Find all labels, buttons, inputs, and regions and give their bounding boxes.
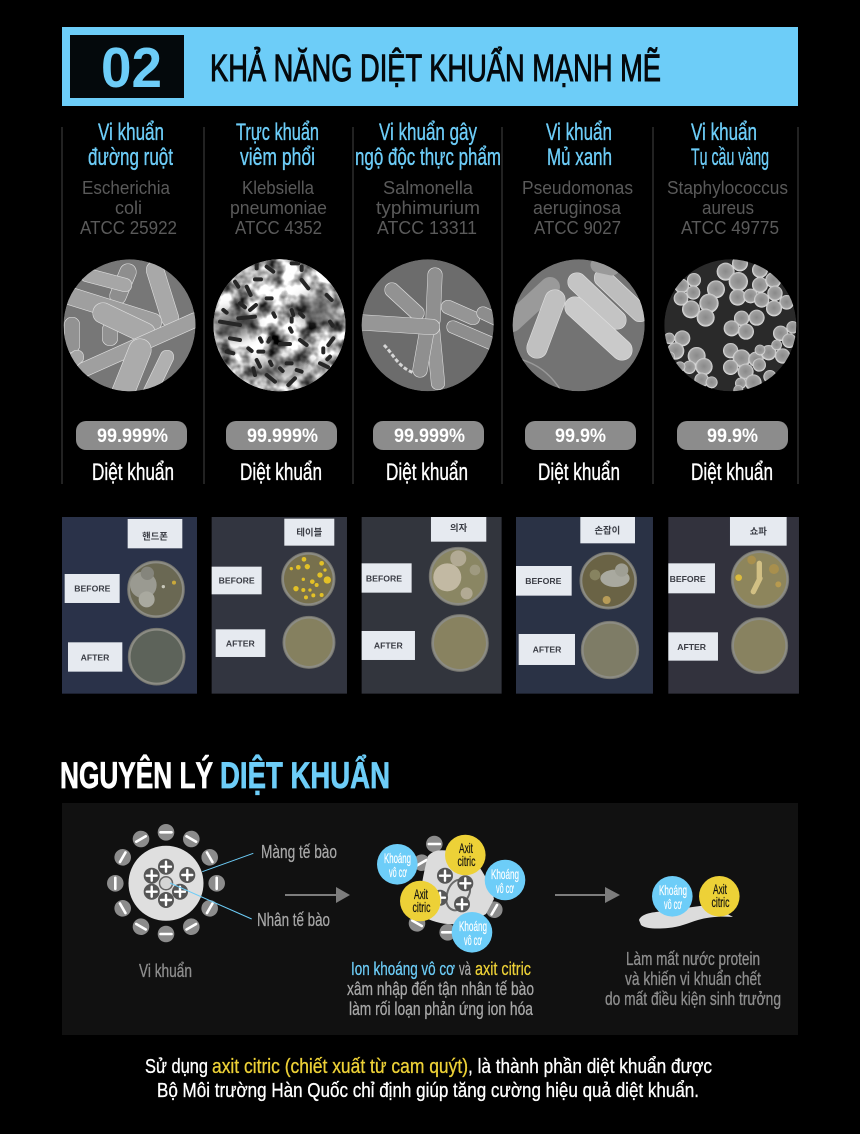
photo: table petri dishes	[212, 517, 347, 694]
mineral ion	[377, 844, 418, 885]
footer note: , là thành phần diệt khuẩn được	[468, 1056, 712, 1078]
footer note: Bộ Môi trường Hàn Quốc chỉ định giúp tăng cường hiệu quả diệt khuẩn.	[157, 1080, 699, 1102]
section number: 02	[101, 36, 162, 100]
diagram: bacterium	[107, 824, 253, 942]
scientific name: ATCC 49775	[681, 218, 779, 238]
mineral ion	[485, 860, 525, 900]
arrow: step one to two	[285, 887, 350, 903]
caption: dehydration: và khiến vi khuẩn chết	[625, 969, 761, 989]
scientific name: ATCC 25922	[80, 218, 177, 238]
bacteria name: Vi khuẩn	[546, 119, 612, 146]
photo: chair petri dishes: BEFORE	[366, 573, 402, 583]
citric acid: citric	[458, 853, 476, 869]
kill rate: 99.9%	[707, 426, 758, 447]
micrograph: Salmonella	[355, 259, 498, 391]
kill rate	[76, 421, 187, 450]
scientific name: Salmonella	[383, 178, 474, 198]
scientific name: Klebsiella	[242, 178, 315, 198]
bacteria name: Vi khuẩn	[98, 119, 164, 146]
scientific name: aureus	[702, 198, 754, 218]
label: cell membrane: Màng tế bào	[261, 842, 337, 862]
scientific name	[667, 178, 788, 238]
photo: smartphone petri dishes: BEFORE	[74, 584, 111, 594]
kill label: Diệt khuẩn	[240, 459, 322, 486]
citric acid: citric	[412, 899, 430, 915]
photo: handle petri dishes: 손잡이	[594, 525, 620, 536]
footer note: Sử dụng	[145, 1056, 208, 1078]
scientific name: Escherichia	[82, 178, 171, 198]
bacteria name: Vi khuẩn gây	[379, 119, 477, 146]
bacteria name: Mủ xanh	[547, 144, 612, 171]
caption: ion penetration: làm rối loạn phản ứng ion hóa	[349, 999, 534, 1019]
photo: chair petri dishes: AFTER	[374, 641, 403, 651]
bacteria name	[236, 119, 319, 171]
photo: sofa petri dishes: AFTER	[677, 642, 707, 652]
section number	[70, 35, 184, 100]
mineral ion: vô cơ	[464, 932, 482, 948]
heading: sterilization principle: DIỆT KHUẨN	[220, 754, 390, 796]
kill rate	[226, 421, 337, 450]
scientific name: pneumoniae	[230, 198, 327, 218]
mineral ion: Khoáng	[659, 882, 687, 898]
kill label: Diệt khuẩn	[538, 459, 620, 486]
caption: dehydration	[605, 949, 781, 1009]
caption: ion penetration	[347, 959, 534, 1019]
photo: smartphone petri dishes: AFTER	[81, 653, 110, 663]
panel: Salmonella typhimurium	[355, 119, 501, 486]
caption: ion penetration: và	[459, 959, 472, 979]
photo: sofa petri dishes	[668, 517, 799, 694]
scientific name	[522, 178, 633, 238]
citric acid: Axit	[459, 840, 473, 856]
scientific name: coli	[115, 198, 142, 218]
footer note	[145, 1056, 712, 1102]
bacteria name	[546, 119, 612, 171]
mineral ion: vô cơ	[389, 864, 407, 880]
citric acid: citric	[712, 894, 730, 910]
kill label: Diệt khuẩn	[386, 459, 468, 486]
mineral ion: Khoáng	[384, 850, 411, 866]
mineral ion: Khoáng	[459, 918, 487, 934]
kill rate: 99.999%	[394, 426, 465, 447]
diagram: dead bacterium	[639, 876, 740, 929]
micrograph: Staphylococcus	[664, 255, 799, 395]
scientific name: aeruginosa	[533, 198, 622, 218]
micrograph: Klebsiella	[210, 259, 347, 393]
mineral ion: Khoáng	[491, 866, 519, 882]
kill rate: 99.999%	[247, 426, 318, 447]
mineral ion: vô cơ	[664, 896, 682, 912]
photo: handle petri dishes: AFTER	[533, 645, 562, 655]
panel: Escherichia coli	[64, 119, 196, 486]
kill rate: 99.999%	[97, 426, 168, 447]
photo: chair petri dishes: 의자	[450, 522, 468, 533]
citric acid: Axit	[414, 886, 428, 902]
micrograph: Pseudomonas	[512, 259, 645, 398]
caption: ion penetration: Ion khoáng vô cơ	[351, 959, 455, 979]
kill rate	[677, 421, 788, 450]
scientific name: typhimurium	[376, 198, 480, 218]
panel: sterilization mechanism	[62, 803, 798, 1035]
bacteria name: Vi khuẩn	[691, 119, 757, 146]
scientific name: ATCC 9027	[534, 218, 621, 238]
photo: sofa petri dishes: BEFORE	[670, 574, 706, 584]
heading: sterilization principle: NGUYÊN LÝ	[60, 754, 213, 796]
panel: Klebsiella pneumoniae	[210, 119, 347, 486]
photo: smartphone petri dishes: 핸드폰	[142, 531, 168, 541]
photo: handle petri dishes	[516, 517, 653, 694]
panel: Pseudomonas aeruginosa	[512, 119, 645, 486]
caption: dehydration: do mất điều kiện sinh trưởng	[605, 989, 781, 1009]
photo: sofa petri dishes: 쇼파	[750, 527, 767, 537]
footer note: axit citric (chiết xuất từ cam quýt)	[212, 1056, 468, 1078]
scientific name	[230, 178, 327, 238]
photo: chair petri dishes	[362, 517, 502, 694]
citric acid	[400, 881, 441, 921]
kill label: Diệt khuẩn	[92, 459, 174, 486]
scientific name: Staphylococcus	[667, 178, 788, 198]
title: KHẢ NĂNG DIỆT KHUẨN MẠNH MẼ	[210, 45, 661, 90]
caption: ion penetration: axit citric	[475, 959, 531, 979]
bacteria name	[355, 119, 501, 171]
bacteria name: Trực khuẩn	[236, 119, 319, 146]
photo: handle petri dishes: BEFORE	[525, 576, 562, 586]
caption: ion penetration: xâm nhập đến tận nhân tế bào	[347, 979, 534, 999]
scientific name	[376, 178, 480, 238]
photo: table petri dishes: 테이블	[296, 527, 323, 538]
bacteria name: Tụ cầu vàng	[691, 144, 769, 171]
caption: dehydration: Làm mất nước protein	[626, 949, 760, 969]
bacteria name: viêm phổi	[240, 144, 315, 171]
citric acid	[445, 835, 486, 875]
photo: smartphone petri dishes	[62, 517, 197, 694]
photo: table petri dishes: AFTER	[226, 638, 255, 648]
kill label: Diệt khuẩn	[691, 459, 773, 486]
diagram: ions entering cell	[377, 835, 525, 953]
kill rate	[525, 421, 636, 450]
mineral ion	[652, 876, 693, 917]
bacteria name	[691, 119, 769, 171]
arrow: step two to three	[555, 887, 620, 903]
heading: sterilization principle	[60, 754, 390, 796]
kill rate: 99.9%	[555, 426, 606, 447]
citric acid: Axit	[713, 881, 727, 897]
bacteria name: ngộ độc thực phẩm	[355, 144, 501, 171]
bacteria name	[88, 119, 173, 171]
scientific name: ATCC 13311	[377, 218, 477, 238]
mineral ion	[452, 912, 492, 953]
bacteria name: đường ruột	[88, 144, 173, 171]
label: cell nucleus: Nhân tế bào	[257, 910, 330, 930]
mineral ion: vô cơ	[496, 880, 514, 896]
citric acid	[699, 876, 740, 917]
header banner	[62, 27, 798, 106]
scientific name	[80, 178, 177, 238]
panel: Staphylococcus aureus	[664, 119, 799, 486]
scientific name: Pseudomonas	[522, 178, 633, 198]
caption: bacterium: Vi khuẩn	[139, 961, 192, 981]
photo: table petri dishes: BEFORE	[219, 575, 255, 585]
scientific name: ATCC 4352	[235, 218, 322, 238]
micrograph: E. coli	[64, 259, 196, 395]
kill rate	[373, 421, 484, 450]
